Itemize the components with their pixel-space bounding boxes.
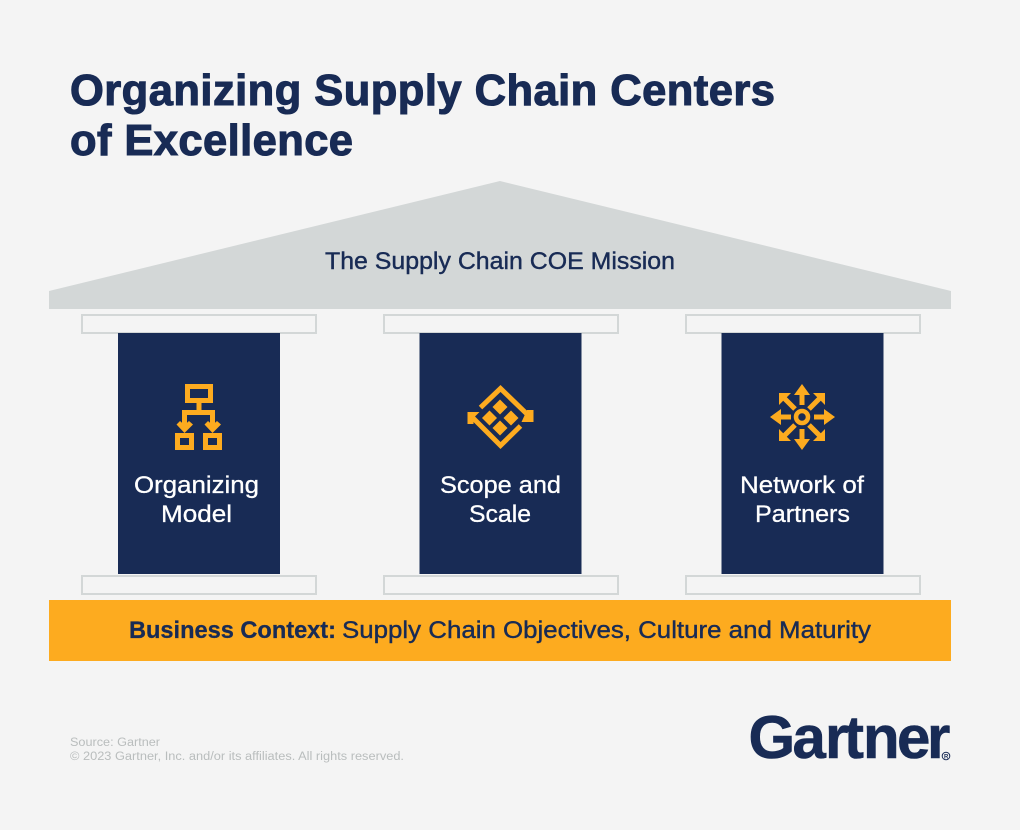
roof: the supply chain COE mission xyxy=(49,181,951,309)
pillar: scope and scale xyxy=(384,315,618,594)
title: of Excellence xyxy=(70,117,353,165)
pillar: network of partners: Partners xyxy=(755,501,850,528)
foundation band: business context: Supply Chain Objectives, Culture and Maturity xyxy=(342,617,871,644)
pillar: organizing model xyxy=(82,315,316,594)
title xyxy=(70,67,775,165)
foundation band: business context xyxy=(49,600,951,661)
pillar: scope and scale: Scope and xyxy=(440,472,561,499)
pillar: network of partners: Network of xyxy=(740,472,864,499)
gartner logo: Gartner xyxy=(748,704,950,771)
source and copyright note xyxy=(70,737,404,763)
title: Organizing Supply Chain Centers xyxy=(70,67,775,115)
icon: hub with radiating arrows xyxy=(770,384,835,450)
pillar: network of partners xyxy=(686,315,920,594)
foundation band: business context: Business Context: xyxy=(129,617,336,644)
icon: diamond with arrows xyxy=(468,388,534,446)
icon: org chart xyxy=(176,386,221,448)
source and copyright note: Source: Gartner xyxy=(70,737,160,749)
roof: the supply chain COE mission: The Supply Chain COE Mission xyxy=(325,248,675,275)
pillar: organizing model: Model xyxy=(161,501,232,528)
gartner logo: R xyxy=(944,754,949,760)
pillar: organizing model: Organizing xyxy=(134,472,259,499)
pillar: scope and scale: Scale xyxy=(469,501,531,528)
source and copyright note: © 2023 Gartner, Inc. and/or its affiliates. All rights reserved. xyxy=(70,751,404,763)
